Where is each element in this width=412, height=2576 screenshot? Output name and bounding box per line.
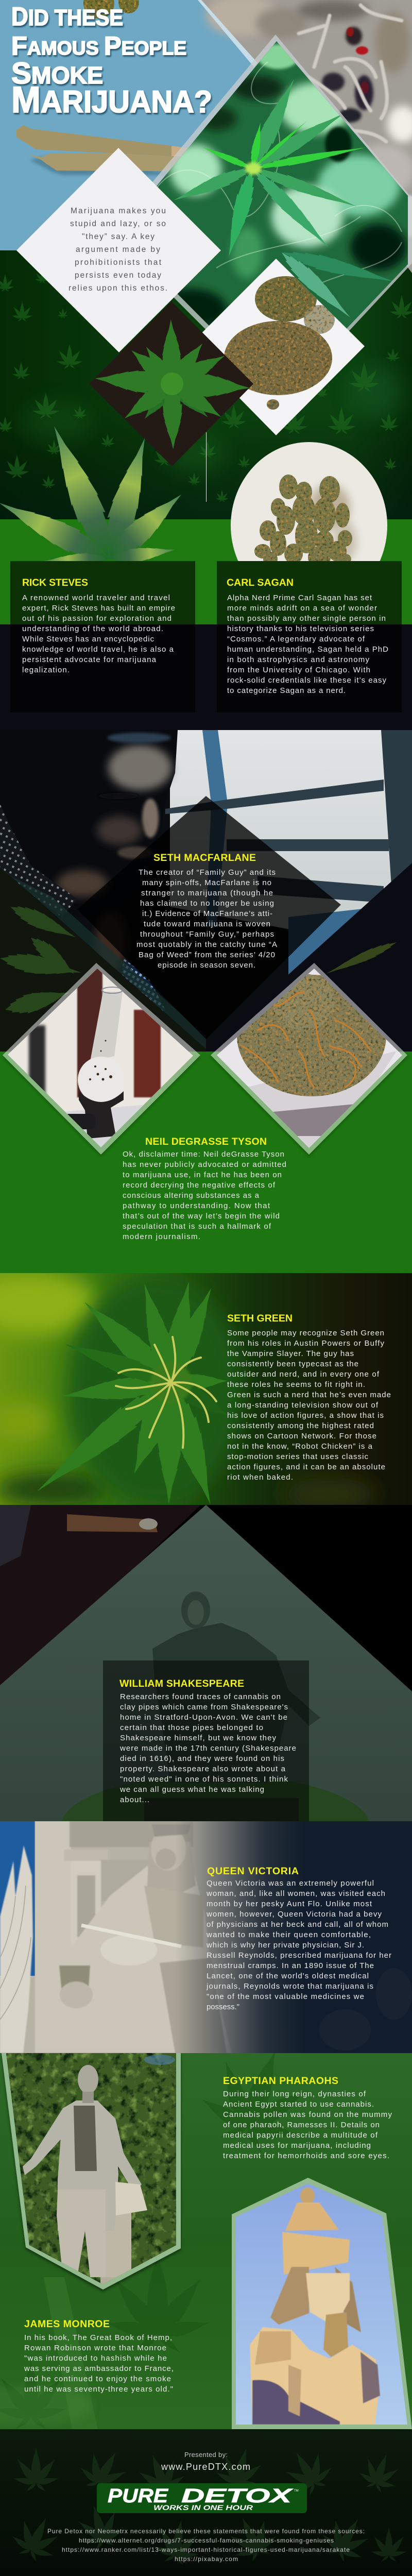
body text: died in 1616), and they were found on his (120, 1754, 284, 1763)
lower left leaf overlay (0, 867, 206, 1052)
panel: Seth MacFarlane (0, 730, 412, 1052)
bright green band (0, 519, 412, 624)
logo: Pure Detox: DETOX (181, 2485, 294, 2507)
presented by: Presented by: (184, 2451, 228, 2459)
panel: William Shakespeare (0, 1505, 412, 1821)
body text: James Monroe: "was introduced to hashish while he (24, 2354, 167, 2363)
lower right dark overlay (288, 863, 412, 979)
body text: Russell Reynolds, prescribed marijuana for her (207, 1951, 391, 1960)
panel: Neil deGrasse Tyson (0, 963, 412, 1273)
logo: Pure Detox: TM (294, 2489, 299, 2493)
body text: Lancet, one of the world's oldest medical (207, 1972, 369, 1980)
heading: Egyptian Pharaohs: EGYPTIAN PHARAOHS (223, 2075, 338, 2087)
body text: stop-motion series that uses classic (227, 1452, 369, 1461)
body text: that’s out of the way let’s begin the wild (123, 1212, 280, 1221)
photo: Ramesses II statue (232, 2178, 412, 2429)
photo: close-up bud diamond (211, 963, 407, 1155)
body text: A renowned world traveler and travel (22, 594, 170, 602)
body text (136, 868, 277, 970)
sources: Pure Detox nor Neometrx necessarily believe these statements that were found from these sources: (47, 2528, 365, 2535)
panel: green section with James Monroe and Egyptian Pharaohs (0, 2032, 412, 2431)
body text: While Steves has an encyclopedic (22, 635, 154, 643)
body text: "noted weed" in one of his sonnets. I think (120, 1775, 288, 1784)
intro text diamond: "they” say. A key (82, 232, 154, 241)
body text: than possibly any other single person in (227, 614, 386, 623)
body text: Egyptian Pharaohs: of one pharaoh, Ramesses II. Details on (223, 2121, 380, 2129)
photo: cannabis bud diamond (188, 259, 365, 435)
logo: Pure Detox: WORKS IN ONE HOUR (153, 2504, 253, 2512)
dark leaf background (0, 2429, 412, 2576)
body text: Egyptian Pharaohs (223, 2090, 392, 2160)
body text: Egyptian Pharaohs: Cannabis pollen was found on the mummy (223, 2110, 392, 2119)
body text: Egyptian Pharaohs: treatment for hemorrhoids and sore eyes. (223, 2151, 389, 2160)
large gradient cannabis leaf (0, 421, 189, 570)
body text: James Monroe: was serving as ambassador to France, (24, 2364, 174, 2373)
body text: month by her pesky Aunt Flo. Unlike most (207, 1900, 372, 1908)
panel: dark background behind cards (0, 624, 412, 730)
intro text diamond: prohibitionists that (75, 258, 162, 267)
body text (227, 594, 388, 695)
panel: Seth Green (0, 1273, 412, 1510)
card background (10, 561, 195, 713)
photo: cannabis flower close-up (0, 1273, 412, 1510)
pale green pentagon (0, 1505, 412, 1821)
body text: of physicians at her beck and call, all of whom (207, 1920, 388, 1929)
sources: https://pixabay.com (175, 2555, 238, 2563)
heading: CARL SAGAN (227, 577, 294, 588)
body text: it.) Evidence of MacFarlane’s atti- (142, 909, 272, 918)
photo: rolled joints (16, 125, 191, 175)
photo: burning ash (201, 0, 412, 273)
body text: James Monroe: and he continued to enjoy the smoke (24, 2375, 171, 2383)
photo: smoking hand on black (0, 1505, 201, 1685)
intro text diamond: relies upon this ethos. (68, 284, 167, 293)
heading: QUEEN VICTORIA (207, 1866, 299, 1877)
body text: journals, Reynolds wrote that marijuana is (206, 1982, 373, 1991)
body text: Some people may recognize Seth Green (227, 1329, 384, 1337)
body text: episode in season seven. (158, 961, 255, 970)
body text: James Monroe: In his book, The Great Book of Hemp, (24, 2333, 172, 2342)
body text: woman, and, like all women, was visited each (206, 1889, 385, 1898)
photo: man by window (0, 730, 412, 1052)
dark green leaf-pattern background (0, 250, 412, 519)
body text: certain that those pipes belonged to (120, 1723, 263, 1732)
body text: conscious altering substances as a (123, 1191, 260, 1200)
body text: which is why her private physician, Sir J. (206, 1941, 364, 1950)
logo: Pure Detox: PURE (108, 2485, 169, 2507)
body text: we can all guess what he was talking (119, 1785, 264, 1794)
body text: from his roles in Austin Powers or Buffy (227, 1339, 384, 1348)
body text: Researchers found traces of cannabis on (120, 1692, 281, 1701)
body text: Queen Victoria was an extremely powerful (207, 1879, 374, 1888)
body text: property. Shakespeare also wrote about a (120, 1765, 286, 1773)
panel: header collage (0, 0, 412, 624)
body text: human understanding, Sagan held a PhD (227, 645, 388, 654)
body text: history thanks to his television series (227, 624, 374, 633)
body text: a long-standing television show out of (227, 1401, 379, 1410)
heading: RICK STEVES (22, 577, 88, 588)
body text: the Vampire Slayer. The guy has (227, 1349, 354, 1358)
title (11, 2, 212, 121)
body text: rock-solid credentials like these it’s easy (227, 676, 386, 685)
heading: SETH MACFARLANE (153, 852, 256, 863)
body text: “Cosmos.” A legendary advocate of (227, 635, 365, 643)
translucent strip (0, 867, 206, 1049)
body text: home in Stratford-Upon-Avon. We can't be (120, 1713, 287, 1722)
intro text diamond (16, 148, 221, 352)
body text: to categorize Sagan as a nerd. (227, 686, 346, 695)
body text (227, 1329, 391, 1482)
white vertical divider (206, 432, 207, 502)
sources: https://www.alternet.org/drugs/7-successful-famous-cannabis-smoking-geniuses (79, 2537, 334, 2544)
large leaf lower leaflets (44, 548, 175, 561)
title: SMOKE (11, 57, 103, 90)
body text: Egyptian Pharaohs: medical uses for marijuana, including (223, 2141, 371, 2150)
panel: Queen Victoria (0, 1821, 412, 2053)
body text: The creator of “Family Guy” and its (139, 868, 276, 877)
body text (123, 1150, 286, 1241)
photo: seedling in soil diamond (89, 301, 253, 466)
blue paper background (0, 0, 412, 250)
photo: nuggets at top (83, 0, 139, 19)
dark text diamond (77, 796, 341, 1039)
body text: Egyptian Pharaohs: During their long reign, dynasties of (223, 2090, 366, 2098)
green background (0, 1052, 412, 1273)
body text: riot when baked. (227, 1473, 293, 1482)
body text: James Monroe (24, 2333, 174, 2394)
body text: possess." (207, 2003, 239, 2011)
body text: Egyptian Pharaohs: Ancient Egypt started to use cannabis. (223, 2100, 374, 2109)
body text: expert, Rick Steves has built an empire (22, 604, 175, 613)
body text: pathway to understanding. Now that (123, 1201, 270, 1210)
heading: WILLIAM SHAKESPEARE (119, 1678, 244, 1689)
body text: knowledge of world travel, he is also a (22, 645, 174, 654)
body text: women, however, Queen Victoria had a bevy (206, 1910, 382, 1919)
plate of buds (231, 442, 387, 561)
title: MARIJUANA? (11, 80, 212, 121)
title: DID THESE (11, 2, 123, 31)
green leafy background (0, 2032, 412, 2431)
body text: more minds adrift on a sea of wonder (227, 604, 377, 613)
body text: menstrual cramps. In an 1890 issue of The (207, 1961, 374, 1970)
body text: outsider and nerd, and in every one of (227, 1370, 380, 1379)
body text (206, 1879, 391, 2011)
body text: consistently among the highest rated (227, 1421, 374, 1430)
body text: clay pipes which came from Shakespeare's (120, 1703, 288, 1711)
panel: Rick Steves (10, 561, 195, 713)
body text: legalization. (22, 666, 70, 674)
body text: tude toward marijuana is woven (144, 920, 270, 928)
photo: glass bong diamond (0, 963, 206, 1155)
body text: shows on Cartoon Network. For those (227, 1432, 376, 1440)
body text: from the University of Chicago. With (227, 666, 370, 674)
body text: throughout “Family Guy,” perhaps (140, 930, 274, 939)
heading: James Monroe: JAMES MONROE (24, 2318, 110, 2330)
intro text diamond: stupid and lazy, or so (70, 219, 166, 228)
body text: not in the know, “Robot Chicken” is a (227, 1442, 373, 1451)
body text: consistently been typecast as the (227, 1360, 358, 1368)
translucent text box (103, 1660, 309, 1821)
website: www.PureDTX.com (161, 2462, 250, 2472)
body text: Ok, disclaimer time: Neil deGrasse Tyson (123, 1150, 284, 1159)
panel: footer (0, 2429, 412, 2576)
body text: these roles he seems to fit right in. (227, 1380, 365, 1389)
body text: in both astrophysics and astronomy (227, 655, 370, 664)
statue of Shakespeare (62, 1591, 369, 1821)
body text: persistent advocate for marijuana (22, 655, 157, 664)
photo: Queen Victoria memorial (0, 1821, 412, 2053)
body text: action figures, and it can be an absolute (227, 1463, 385, 1471)
body text: James Monroe: Rowan Robinson wrote that Monroe (24, 2344, 166, 2352)
body text: "one of the most valuable medicines we (207, 1992, 364, 2001)
photo: James Monroe statue (0, 2053, 181, 2290)
photo: smoky cannabis plant diamond (152, 35, 412, 331)
body text: has never publicly advocated or admitted (123, 1160, 286, 1169)
intro text diamond: Marijuana makes you (71, 207, 166, 215)
intro text diamond: persists even today (75, 271, 161, 280)
body text: about... (120, 1795, 149, 1804)
card background (217, 561, 402, 713)
heading: NEIL DEGRASSE TYSON (145, 1136, 267, 1147)
body text: stranger to marijuana (though he (141, 889, 273, 897)
body text: Green is such a nerd that he’s even made (227, 1391, 391, 1399)
body text: out of his passion for exploration and (22, 614, 171, 623)
body text: Bag of Weed” from the series’ 4/20 (139, 951, 275, 959)
body text: Alpha Nerd Prime Carl Sagan has set (227, 594, 372, 602)
sources: https://www.ranker.com/list/13-ways-important-historical-figures-used-marijuana/sarakate (62, 2546, 350, 2553)
body text: understanding of the world abroad. (22, 624, 163, 633)
body text: Egyptian Pharaohs: medical papyrii describe a multitude of (223, 2131, 378, 2140)
body text: were made in the 17th century (Shakespeare (119, 1744, 296, 1753)
body text: James Monroe: until he was seventy-three years old." (24, 2385, 173, 2394)
body text: modern journalism. (123, 1232, 200, 1241)
body text: has claimed to no longer be using (140, 899, 274, 908)
body text: his love of action figures, a show that is (227, 1411, 384, 1420)
body text: Shakespeare himself, but we know they (120, 1734, 276, 1742)
body text (22, 594, 175, 674)
body text: wanted to make their queen comfortable, (206, 1930, 371, 1939)
panel: Carl Sagan (217, 561, 402, 713)
body text: most quotably in the catchy tune “A (136, 940, 277, 949)
body text (119, 1692, 296, 1804)
body text: record decrying the negative effects of (123, 1181, 276, 1190)
body text: to marijuana use, in fact he has been on (123, 1171, 282, 1179)
logo: Pure Detox (97, 2483, 307, 2513)
title: FAMOUS PEOPLE (11, 31, 186, 60)
sources (47, 2528, 365, 2563)
body text: many spin-offs, MacFarlane is no (142, 878, 271, 887)
heading: SETH GREEN (227, 1313, 293, 1324)
body text: speculation that is such a hallmark of (123, 1222, 271, 1231)
intro text diamond: argument made by (76, 245, 160, 254)
pale border strip (198, 0, 258, 67)
